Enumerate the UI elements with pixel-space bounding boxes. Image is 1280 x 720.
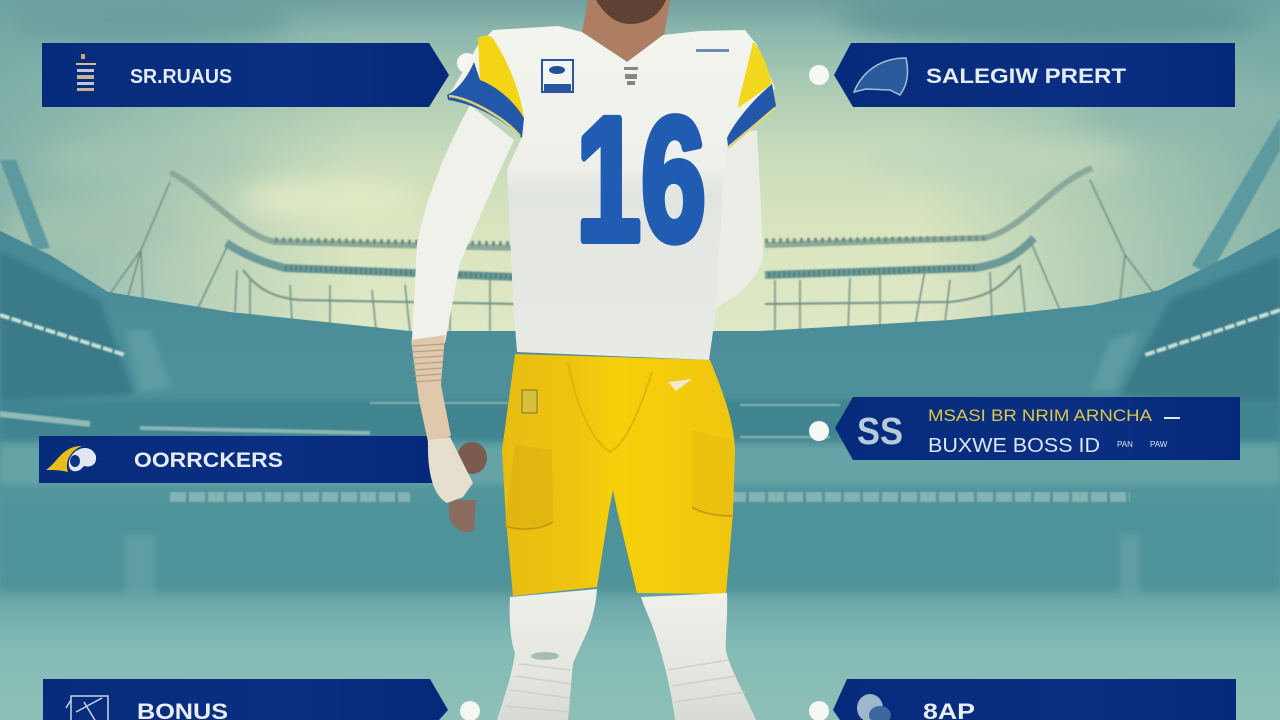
small marks: PAW	[1150, 440, 1168, 449]
label: white line: BUXWE BOSS ID	[928, 435, 1100, 457]
right leg	[641, 593, 756, 720]
panel: bottom right	[833, 679, 1236, 720]
right sleeve blue band	[727, 84, 776, 146]
panel: top right	[834, 43, 1235, 107]
forearm with tape	[411, 335, 451, 442]
connector dot: middle right	[809, 421, 829, 441]
small marks	[1117, 417, 1180, 449]
left leg	[497, 589, 597, 720]
player figure	[411, 0, 776, 720]
player neck and chin	[582, 0, 670, 62]
panel: middle right	[835, 397, 1240, 460]
icon: trophy stack	[76, 54, 96, 91]
label: top right: SALEGIW PRERT	[926, 65, 1126, 88]
icon: rams logo	[46, 446, 96, 472]
jersey number: 16	[576, 82, 706, 278]
panel: top left	[42, 43, 449, 107]
pants swoosh	[668, 379, 692, 391]
hand wrap	[428, 437, 473, 503]
label: middle left: OORRCKERS	[134, 449, 283, 472]
pants patch	[522, 390, 537, 413]
connector dot: top right	[809, 65, 829, 85]
stadium roof and truss	[0, 118, 1280, 333]
collar patch	[542, 60, 573, 92]
icon: chart box	[66, 696, 108, 720]
label: yellow line: MSASI BR NRIM ARNCHA	[928, 406, 1153, 425]
right shoulder yellow stripe	[738, 42, 772, 108]
field	[0, 585, 1280, 720]
right arm	[713, 130, 763, 310]
icon: rams head	[857, 694, 891, 720]
pants	[502, 354, 735, 596]
football	[449, 442, 487, 532]
jersey	[447, 26, 776, 360]
panel: bottom left	[43, 679, 448, 720]
chest wordmark	[696, 49, 729, 52]
label: top left: SR.RUAUS	[130, 66, 232, 88]
sky	[0, 0, 1280, 340]
left arm sleeve	[412, 105, 514, 343]
stands	[0, 228, 1280, 620]
icon: dollar signs: SS	[857, 411, 903, 453]
small marks: PAN	[1117, 440, 1133, 449]
collar logo	[624, 67, 638, 85]
left sleeve blue band	[447, 62, 524, 138]
icon: helmet	[854, 58, 908, 95]
left shoulder yellow stripe	[478, 36, 524, 118]
connector dot: bottom right	[809, 701, 829, 720]
connector dot: bottom left	[460, 701, 480, 720]
connector dot: top left	[457, 53, 477, 73]
panel: middle left	[39, 436, 434, 483]
